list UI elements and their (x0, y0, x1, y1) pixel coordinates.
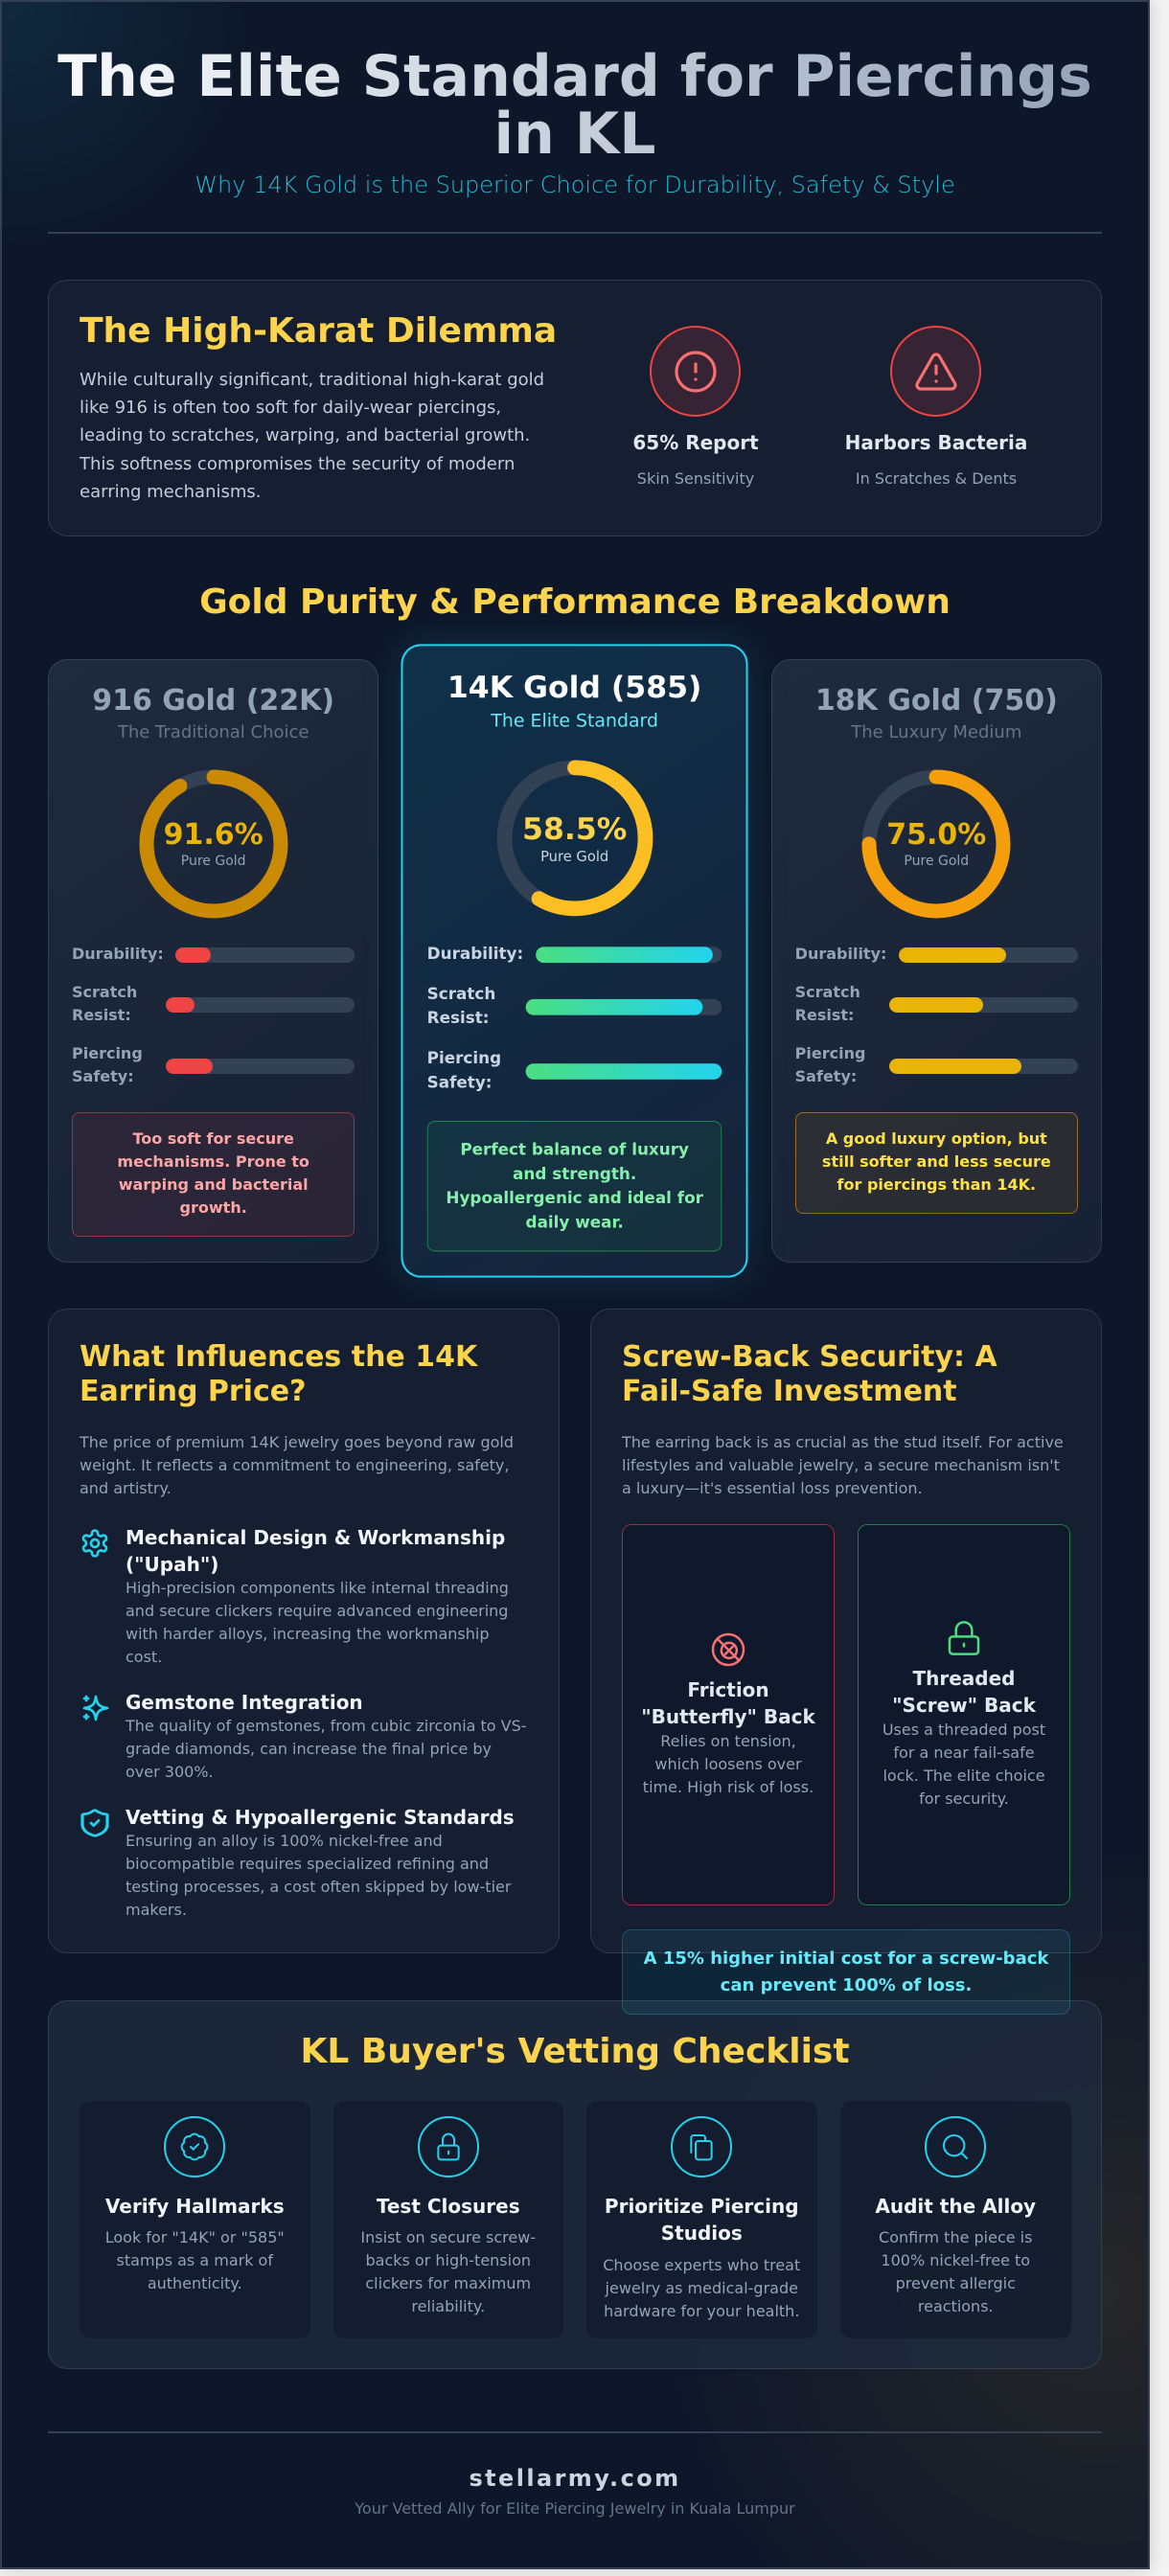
back title (892, 1667, 1037, 1717)
section heading: gold purity: Gold Purity & Performance Breakdown (199, 582, 951, 621)
footer divider (48, 2431, 1102, 2433)
label: scratch resist: Scratch (72, 983, 137, 1001)
bar: durability (536, 946, 722, 963)
panel: buyer's checklist (48, 2000, 1102, 2369)
factor text: testing processes, a cost often skipped by low-tier (126, 1878, 511, 1896)
icon: gear (82, 1529, 107, 1558)
factor text: biocompatible requires specialized refining and (126, 1855, 489, 1873)
item title: Test Closures (377, 2195, 520, 2218)
intro text: lifestyles and valuable jewelry, a secure mechanism isn't (622, 1456, 1060, 1474)
footer (48, 2431, 1102, 2518)
factor text: cost. (126, 1648, 162, 1666)
verdict note: daily wear. (526, 1213, 624, 1231)
label: durability: Durability: (72, 945, 164, 963)
factor title (126, 1526, 505, 1576)
label: piercing safety: Piercing (795, 1044, 865, 1062)
factor text: and secure clickers require advanced engineering (126, 1602, 508, 1620)
item text: authenticity. (148, 2274, 242, 2292)
verdict note (795, 1112, 1078, 1214)
icon: sparkles (82, 1696, 109, 1721)
back title: Friction (687, 1678, 769, 1701)
factor: mechanical design (82, 1526, 509, 1666)
item text: hardware for your health. (604, 2301, 799, 2320)
verdict note: Perfect balance of luxury (461, 1140, 689, 1159)
bar: scratch resist (889, 997, 1078, 1013)
bar: scratch resist (526, 999, 722, 1015)
card subtitle: The Luxury Medium (851, 722, 1021, 741)
item text (105, 2228, 285, 2292)
item text: backs or high-tension (365, 2251, 531, 2269)
donut value: 58.5% (522, 811, 628, 847)
item text (879, 2228, 1032, 2315)
back text: Uses a threaded post (882, 1721, 1045, 1739)
label: scratch resist: Resist: (795, 1006, 854, 1024)
icon: magnifier (925, 2116, 986, 2177)
back text: time. High risk of loss. (643, 1778, 814, 1796)
back text: which loosens over (654, 1755, 802, 1773)
item text: clickers for maximum (365, 2274, 531, 2292)
card subtitle: The Traditional Choice (118, 722, 309, 741)
bar: scratch resist (166, 997, 355, 1013)
factor text (126, 1579, 509, 1666)
donut value: 91.6% (164, 818, 264, 851)
item title: Prioritize Piercing (605, 2195, 799, 2218)
icon: warning triangle (890, 326, 981, 417)
back text (643, 1732, 814, 1796)
title (48, 48, 1102, 163)
panel heading: Earring Price? (80, 1375, 306, 1408)
panel heading: Fail-Safe Investment (622, 1375, 957, 1408)
verdict note: Hypoallergenic and ideal for (447, 1188, 703, 1207)
intro text: and artistry. (80, 1479, 172, 1497)
dilemma text: This softness compromises the security of modern (80, 454, 515, 474)
donut value: 75.0% (886, 818, 986, 851)
factor text: The quality of gemstones, from cubic zirconia to VS- (126, 1717, 527, 1735)
label: piercing safety: Safety: (427, 1073, 493, 1092)
dilemma text (79, 370, 544, 502)
callout: cost vs loss (622, 1929, 1070, 2015)
factor text: with harder alloys, increasing the workmanship (126, 1625, 489, 1643)
header divider (48, 232, 1102, 234)
item text (360, 2228, 536, 2315)
verdict note (427, 1121, 722, 1251)
label: durability: Durability: (427, 944, 524, 963)
intro text (79, 1433, 514, 1497)
dilemma text: like 916 is often too soft for daily-wear piercings, (80, 398, 501, 418)
item text: reactions. (918, 2297, 994, 2315)
item title (605, 2195, 799, 2245)
bar: piercing safety (526, 1063, 722, 1080)
factor text: over 300%. (126, 1763, 214, 1781)
intro text: The price of premium 14K jewelry goes beyond raw gold (80, 1433, 514, 1451)
item text: stamps as a mark of (117, 2251, 273, 2269)
back text: lock. The elite choice (882, 1767, 1045, 1785)
title: in KL (494, 101, 655, 168)
verdict note: growth. (180, 1198, 247, 1217)
factor text: makers. (126, 1901, 187, 1919)
factor text: grade diamonds, can increase the final price by (126, 1740, 492, 1758)
label: piercing safety (72, 1044, 143, 1085)
back text: for security. (919, 1790, 1009, 1808)
factor: vetting (80, 1806, 515, 1919)
item text: 100% nickel-free to (881, 2251, 1030, 2269)
back text: Relies on tension, (660, 1732, 796, 1750)
label: durability: Durability: (795, 945, 886, 963)
donut label: Pure Gold (904, 854, 969, 869)
verdict note: warping and bacterial (119, 1175, 309, 1194)
intro text: a luxury—it's essential loss prevention. (622, 1479, 923, 1497)
item text (603, 2255, 800, 2320)
factor title: Mechanical Design & Workmanship (126, 1526, 505, 1549)
label: scratch resist: Resist: (427, 1008, 490, 1027)
dilemma text: leading to scratches, warping, and bacterial growth. (80, 425, 530, 445)
factor text (125, 1717, 527, 1781)
tagline: Your Vetted Ally for Elite Piercing Jewelry in Kuala Lumpur (355, 2499, 795, 2518)
comparison: butterfly back (622, 1524, 835, 1905)
item text: jewelry as medical-grade (606, 2278, 798, 2297)
verdict note: for piercings than 14K. (837, 1175, 1036, 1194)
item text: Confirm the piece is (879, 2228, 1032, 2246)
label: piercing safety: Piercing (427, 1048, 501, 1067)
panel: price influences (48, 1309, 560, 1953)
verdict note (72, 1112, 355, 1237)
card title: 14K Gold (585) (447, 671, 702, 705)
bar: durability (175, 947, 355, 963)
item title: Audit the Alloy (875, 2195, 1036, 2218)
item text: prevent allergic (896, 2274, 1016, 2292)
factor text (126, 1832, 512, 1919)
checklist item: closures (333, 2101, 563, 2338)
stat label: 65% Report (632, 431, 759, 454)
back title: "Butterfly" Back (641, 1705, 815, 1728)
panel heading (622, 1339, 997, 1408)
back title: "Screw" Back (892, 1694, 1036, 1717)
icon: copy (671, 2116, 732, 2177)
donut label: Pure Gold (181, 854, 246, 869)
panel: 916 gold (48, 659, 378, 1263)
item text: Choose experts who treat (603, 2255, 800, 2274)
panel: 18k gold (771, 659, 1102, 1263)
back title: Threaded (912, 1667, 1016, 1690)
label: scratch resist (427, 984, 496, 1027)
item title: Verify Hallmarks (105, 2195, 285, 2218)
panel: high-karat dilemma (48, 280, 1102, 536)
factor title: Vetting & Hypoallergenic Standards (126, 1806, 515, 1829)
verdict note: Too soft for secure (132, 1129, 294, 1148)
label: scratch resist: Resist: (72, 1006, 131, 1024)
label: piercing safety (427, 1048, 501, 1092)
verdict note: mechanisms. Prone to (117, 1152, 309, 1171)
factor text: Ensuring an alloy is 100% nickel-free and (126, 1832, 443, 1850)
card title: 18K Gold (750) (815, 684, 1058, 718)
label: scratch resist: Scratch (795, 983, 860, 1001)
verdict note: still softer and less secure (822, 1152, 1051, 1171)
icon: lock (949, 1621, 979, 1655)
comparison: screw back (858, 1524, 1070, 1905)
icon: no friction back (711, 1632, 745, 1667)
checklist item: hallmarks (80, 2101, 310, 2338)
stat sublabel: Skin Sensitivity (637, 469, 754, 488)
back title (641, 1678, 816, 1728)
donut chart (862, 770, 1010, 918)
intro text: The earring back is as crucial as the stud itself. For active (622, 1433, 1064, 1451)
callout: cost vs loss: can prevent 100% of loss. (721, 1975, 972, 1995)
label: piercing safety: Safety: (72, 1067, 134, 1085)
icon: badge check (164, 2116, 225, 2177)
intro text (621, 1433, 1064, 1497)
item title: Studios (661, 2222, 743, 2245)
icon: shield check (80, 1809, 109, 1837)
bar: piercing safety (889, 1059, 1078, 1074)
card subtitle: The Elite Standard (492, 710, 658, 731)
verdict note: A good luxury option, but (826, 1129, 1047, 1148)
factor title: ("Upah") (126, 1553, 218, 1576)
item text: Look for "14K" or "585" (105, 2228, 285, 2246)
title: The Elite Standard for Piercings (57, 43, 1092, 110)
back text (882, 1721, 1045, 1808)
callout: cost vs loss: A 15% higher initial cost for a screw-back (644, 1949, 1048, 1969)
checklist heading: KL Buyer's Vetting Checklist (300, 2031, 850, 2071)
label: scratch resist: Scratch (427, 984, 496, 1003)
factor text: High-precision components like internal threading (126, 1579, 509, 1597)
verdict note: and strength. (513, 1164, 637, 1183)
panel heading (80, 1339, 479, 1408)
intro text: weight. It reflects a commitment to engineering, safety, (80, 1456, 509, 1474)
bar: piercing safety (166, 1059, 355, 1074)
donut chart (140, 770, 287, 918)
dilemma text: earring mechanisms. (80, 482, 262, 502)
stat: bacteria (845, 326, 1027, 488)
panel heading: What Influences the 14K (80, 1339, 477, 1374)
back text: for a near fail-safe (893, 1744, 1035, 1762)
panel heading: Screw-Back Security: A (622, 1339, 997, 1374)
label: scratch resist (72, 983, 137, 1024)
factor: gemstone (82, 1691, 527, 1781)
label: scratch resist (795, 983, 860, 1024)
stat label: Harbors Bacteria (845, 431, 1027, 454)
subtitle: Why 14K Gold is the Superior Choice for Durability, Safety & Style (195, 171, 955, 198)
checklist item: alloy (840, 2101, 1071, 2338)
brand: stellarmy.com (469, 2465, 680, 2492)
checklist item: piercing studios (586, 2101, 816, 2338)
label: piercing safety: Safety: (795, 1067, 857, 1085)
factor title: Gemstone Integration (126, 1691, 363, 1714)
item text: Insist on secure screw- (360, 2228, 536, 2246)
label: piercing safety (795, 1044, 865, 1085)
label: piercing safety: Piercing (72, 1044, 143, 1062)
icon: alert circle (650, 326, 741, 417)
item text: reliability. (411, 2297, 485, 2315)
donut chart (496, 761, 653, 916)
panel: 14k gold (featured) (401, 644, 748, 1278)
panel: screw-back security (590, 1309, 1102, 1953)
stat sublabel: In Scratches & Dents (856, 469, 1017, 488)
dilemma text: While culturally significant, traditional high-karat gold (80, 370, 544, 389)
bar: durability (899, 947, 1078, 963)
dilemma heading: The High-Karat Dilemma (80, 310, 557, 351)
stat: skin sensitivity (632, 326, 759, 488)
header (48, 43, 1102, 234)
donut label: Pure Gold (540, 849, 609, 865)
card title: 916 Gold (22K) (92, 684, 334, 718)
icon: lock (418, 2116, 479, 2177)
